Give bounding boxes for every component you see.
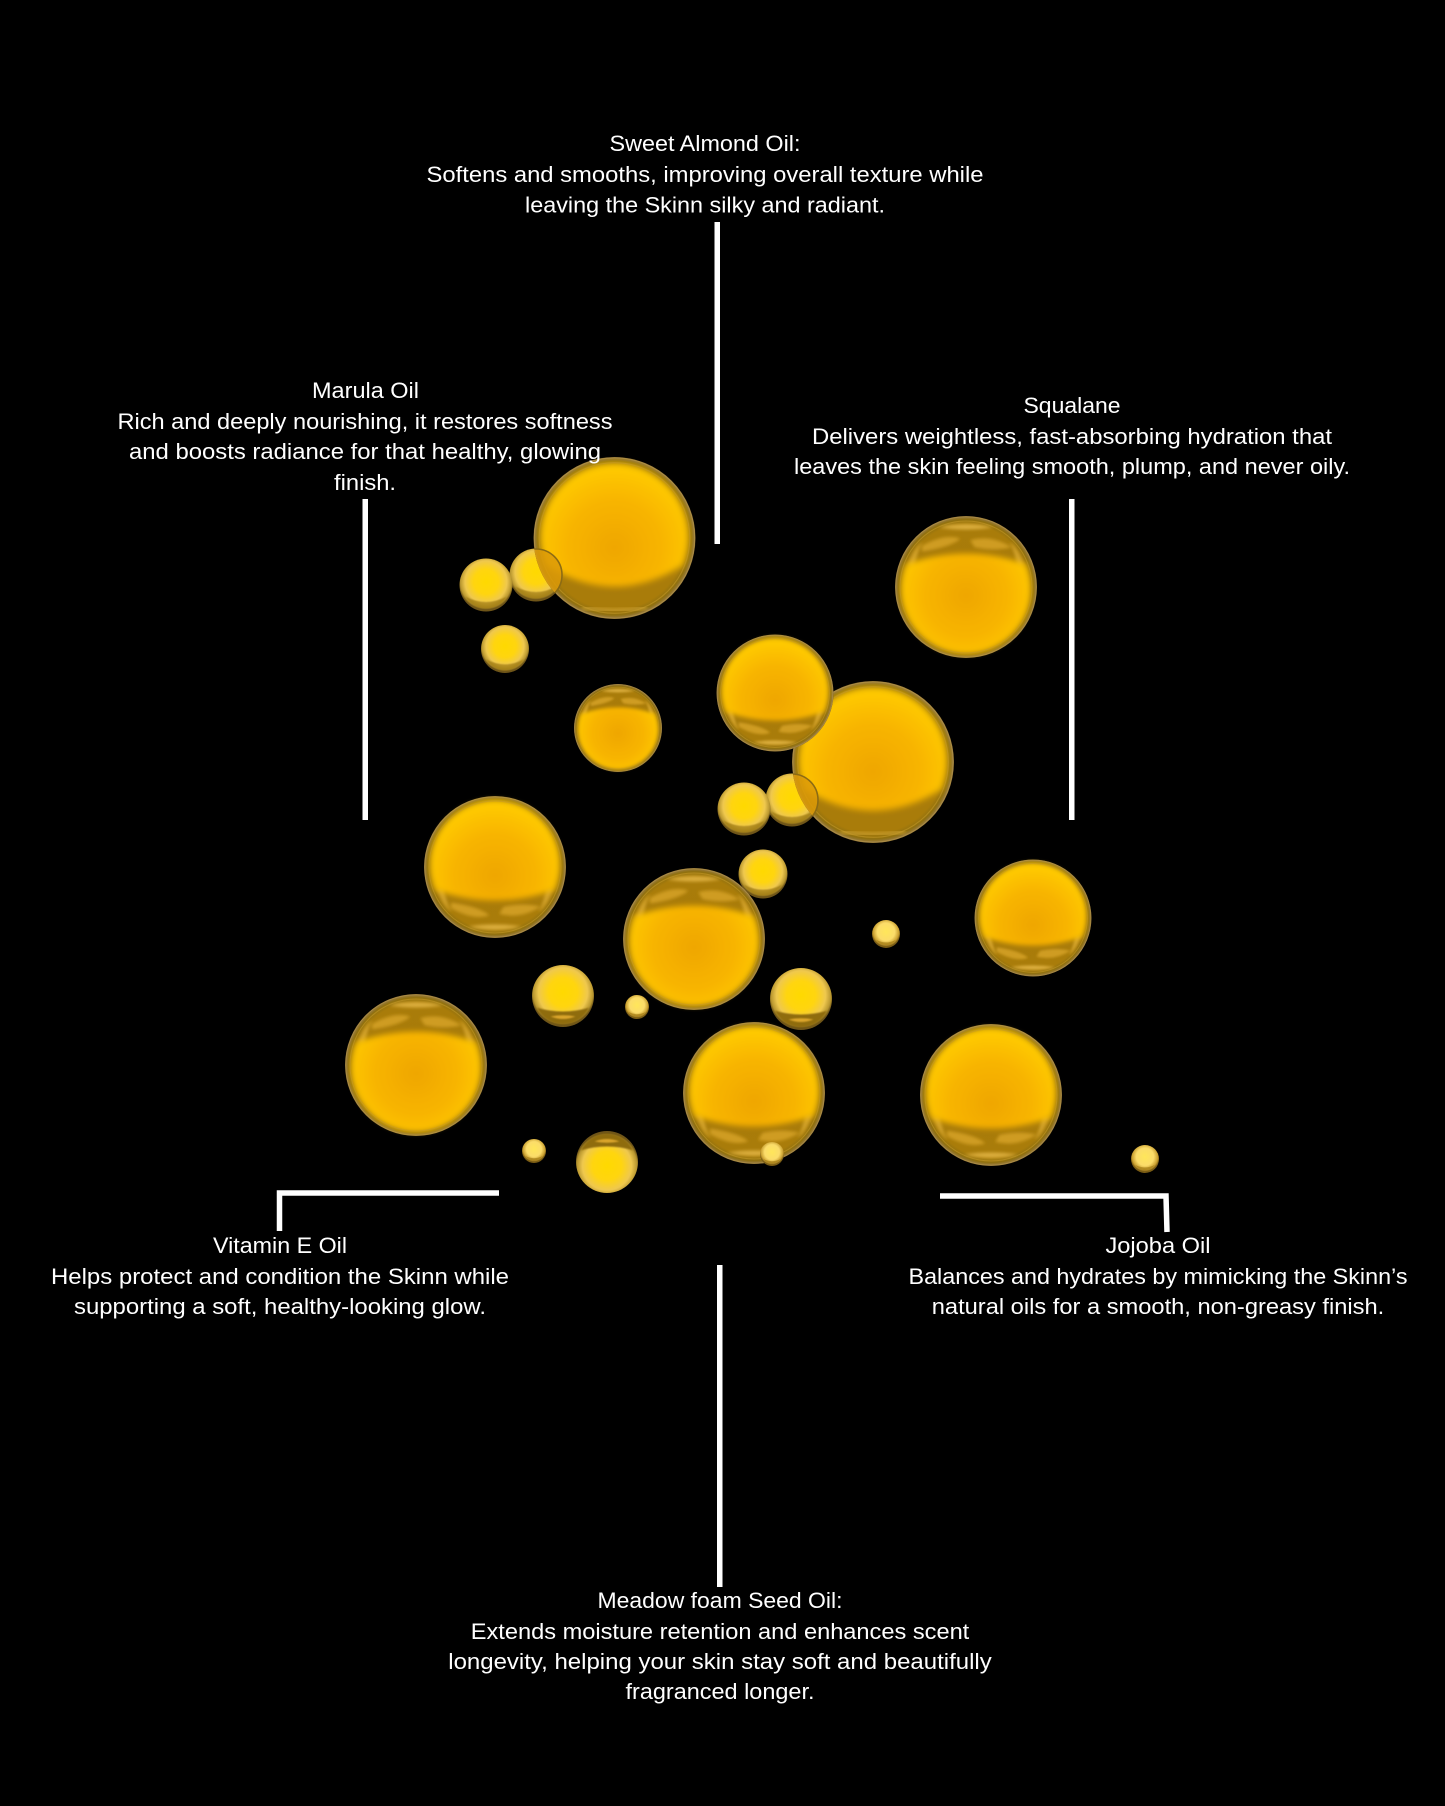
description: Vitamin E Oil <box>51 1264 509 1319</box>
bubble: medium centre <box>716 634 834 752</box>
bubble: tiny lower right <box>1131 1145 1159 1173</box>
oil bubbles cluster <box>345 457 1159 1193</box>
description: Sweet Almond Oil <box>426 162 984 218</box>
bubble: right middle <box>974 860 1092 976</box>
bubble: overlap of small and big top drop <box>534 548 563 594</box>
bubble: small centre <box>718 782 770 836</box>
heading: Marula Oil: Marula Oil <box>312 378 419 403</box>
bubble: small beside big top drop <box>510 548 562 602</box>
description: Squalane <box>794 424 1350 479</box>
heading: Vitamin E Oil: Vitamin E Oil <box>213 1233 347 1258</box>
bracket connector: Vitamin E Oil <box>280 1193 499 1231</box>
bubble: small left <box>532 965 594 1027</box>
bubble: top right <box>895 516 1037 658</box>
bubble: small below left <box>481 625 529 673</box>
description: Marula Oil: Rich and deeply nourishing, it restores softness <box>118 409 612 434</box>
connector line: Marula Oil <box>362 499 368 820</box>
description: Sweet Almond Oil: leaving the Skinn silky and radiant. <box>525 192 885 218</box>
bubble: small under centre <box>766 774 818 826</box>
bubble: big centre right <box>792 681 954 843</box>
description: Meadow foam Seed Oil <box>448 1619 993 1704</box>
description: Meadow foam Seed Oil: fragranced longer. <box>626 1679 814 1704</box>
description: Jojoba Oil: Balances and hydrates by mimicking the Skinn’s <box>908 1264 1408 1289</box>
bubble: lower left <box>345 994 487 1136</box>
heading: Squalane: Squalane <box>1024 393 1120 418</box>
connector line: Squalane <box>1069 499 1074 820</box>
description: Jojoba Oil <box>908 1264 1408 1319</box>
heading: Sweet Almond Oil: Sweet Almond Oil: <box>610 131 800 156</box>
bubble: medium centre left <box>574 684 662 772</box>
heading: Meadow foam Seed Oil: Meadow foam Seed Oil: <box>598 1588 842 1613</box>
bubble: tiny right <box>872 920 900 948</box>
connector line: Sweet Almond Oil <box>714 222 720 544</box>
panel: Marula Oil <box>118 378 612 820</box>
bubble: small lower left <box>576 1131 638 1193</box>
panel: Jojoba Oil <box>908 1196 1408 1319</box>
bubble: tiny centre <box>625 995 649 1019</box>
description: Marula Oil <box>118 409 612 495</box>
description: Marula Oil: and boosts radiance for that healthy, glowing <box>129 439 601 464</box>
bubble: small far left of top drop <box>460 558 512 612</box>
bubble: centre large <box>623 868 765 1010</box>
description: Marula Oil: finish. <box>334 470 396 495</box>
connector line: Meadow foam Seed Oil <box>717 1265 722 1587</box>
description: Sweet Almond Oil: Softens and smooths, improving overall texture while <box>426 162 984 187</box>
panel: Squalane <box>794 393 1350 820</box>
bubble: small below centre <box>738 850 788 898</box>
description: Meadow foam Seed Oil: Extends moisture retention and enhances scent <box>471 1619 970 1644</box>
heading: Jojoba Oil: Jojoba Oil <box>1106 1233 1210 1258</box>
panel: Meadow foam Seed Oil <box>448 1265 993 1704</box>
bubble: tiny on lower centre <box>760 1142 784 1166</box>
bubble: left middle <box>424 796 566 938</box>
bubble: lower right <box>920 1024 1062 1166</box>
description: Meadow foam Seed Oil: longevity, helping your skin stay soft and beautifully <box>448 1649 993 1674</box>
bubble: tiny lower left <box>522 1139 546 1163</box>
description: Jojoba Oil: natural oils for a smooth, non-greasy finish. <box>932 1294 1384 1319</box>
bubble: big top drop <box>534 457 696 619</box>
bubble: overlap of small and big centre drop <box>792 773 819 816</box>
description: Vitamin E Oil: supporting a soft, healthy-looking glow. <box>74 1294 486 1319</box>
description: Squalane: Delivers weightless, fast-absorbing hydration that <box>812 424 1333 449</box>
bubble: small right of centre <box>770 968 832 1030</box>
description: Vitamin E Oil: Helps protect and condition the Skinn while <box>51 1264 509 1289</box>
panel: Sweet Almond Oil <box>426 131 984 544</box>
description: Squalane: leaves the skin feeling smooth, plump, and never oily. <box>794 454 1350 479</box>
bracket connector: Jojoba Oil <box>940 1196 1167 1232</box>
bubble: lower centre <box>683 1022 825 1164</box>
panel: Vitamin E Oil <box>51 1193 509 1319</box>
